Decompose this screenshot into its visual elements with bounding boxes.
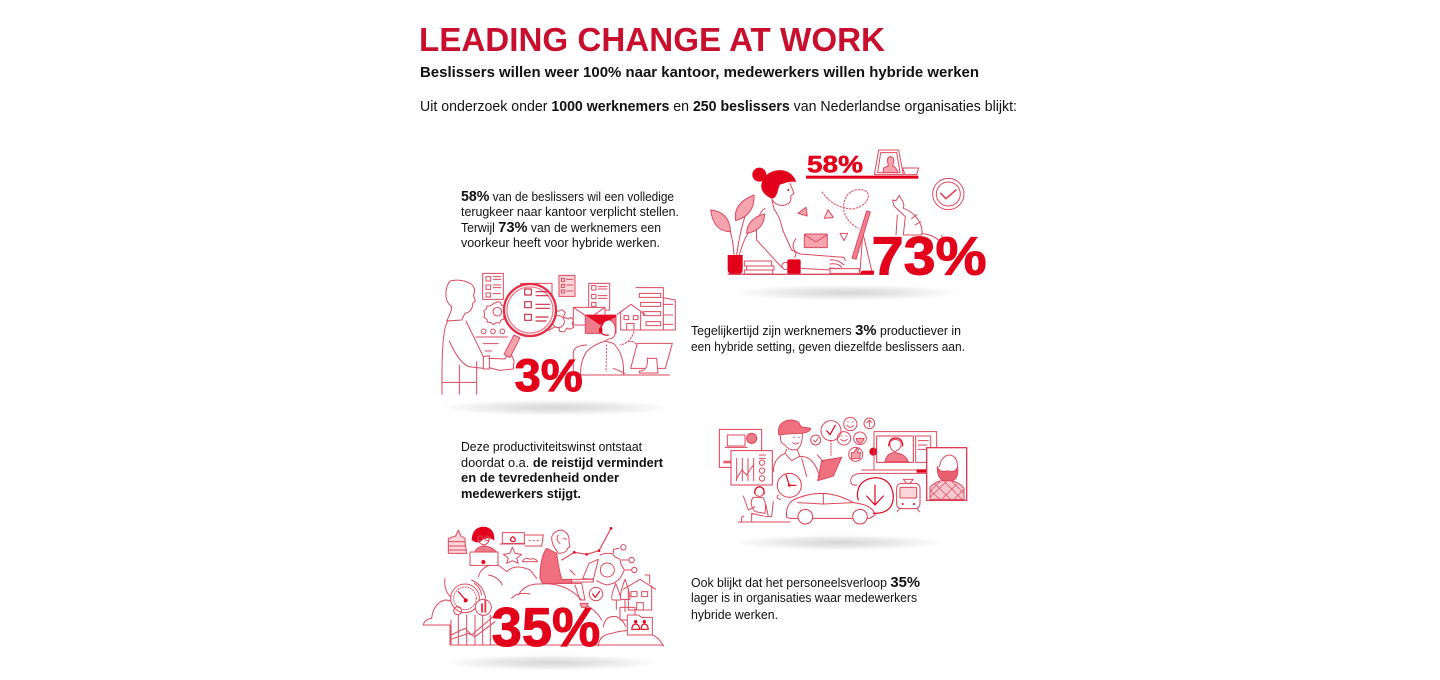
bar and line chart: [451, 615, 495, 645]
text block: 35%: lager is in organisaties waar medewerkers: [691, 591, 917, 605]
illustration: man with magnifier and 3%: [438, 273, 675, 416]
text block: 58% and 73%: voorkeur heeft voor hybride werken.: [461, 236, 660, 250]
magnifying glass: [504, 283, 556, 358]
check badge: [933, 178, 964, 210]
text block: 3%: Tegelijkertijd zijn werknemers 3% productiever in: [691, 322, 961, 339]
bearded man portrait: [927, 448, 967, 500]
text block: 3%: [691, 322, 965, 354]
text block: 58% and 73%: terugkeer naar kantoor verplicht stellen.: [461, 205, 679, 219]
text block: 3%: een hybride setting, geven diezelfde beslissers aan.: [691, 340, 965, 354]
clouds: [423, 564, 663, 646]
envelope and woman with headset: [573, 307, 669, 375]
shadow: [732, 285, 962, 301]
documents with charts: [719, 429, 772, 485]
checklist documents and gears: [483, 273, 610, 332]
older man with laptop: [540, 530, 598, 607]
shelf with 58%: 58%: [807, 151, 863, 178]
shadow: [442, 655, 662, 671]
coffee cup: [782, 239, 801, 274]
check badge: [589, 587, 603, 601]
house and office: [617, 288, 675, 330]
man: [442, 280, 514, 394]
house and trees: [612, 575, 656, 612]
illustration: commuter, car and video call: [719, 417, 967, 551]
monitor and keyboard: [830, 211, 874, 274]
folder with people: [620, 607, 652, 635]
3%: 3%: [515, 350, 583, 401]
building and woman with laptop: [448, 527, 498, 565]
woman: [752, 168, 845, 270]
laptop video call: [851, 432, 937, 485]
delivery man: [773, 420, 842, 481]
35%: 35%: [492, 596, 600, 658]
text block: productiviteitswinst: doordat o.a. de reistijd vermindert: [461, 456, 664, 470]
train: [897, 479, 920, 512]
chat bubbles, star and cloud: [500, 533, 543, 563]
plant: [711, 195, 765, 274]
illustration: clouds, people and 35%: [423, 527, 663, 671]
illustration: woman at desk with 58% and 73%: [711, 150, 987, 301]
text block: productiviteitswinst: Deze productiviteitswinst ontstaat: [461, 440, 643, 454]
text block: productiviteitswinst: en de tevredenheid onder: [461, 471, 619, 485]
shadow: [438, 400, 672, 416]
down arrow circle: [857, 478, 893, 513]
growth line: [562, 527, 612, 560]
text block: 58% and 73%: Terwijl 73% van de werknemers een: [461, 219, 661, 236]
text block: 58% and 73%: 58% van de beslissers wil een volledige: [461, 188, 674, 205]
cat: [893, 195, 942, 240]
73%: 73%: [872, 226, 987, 286]
shelf with 58%: [806, 150, 919, 179]
text block: 58% and 73%: [461, 188, 679, 250]
intro text: Uit onderzoek onder 1000 werknemers en 250 beslissers van Nederlandse organisaties blijkt:: [420, 98, 1017, 115]
text block: productiviteitswinst: medewerkers stijgt.: [461, 487, 581, 501]
text block: 35%: Ook blijkt dat het personeelsverloop 35%: [691, 574, 920, 591]
books: [744, 261, 774, 274]
monitor: [620, 332, 672, 373]
text block: 35%: [691, 574, 920, 622]
text block: productiviteitswinst: [461, 440, 664, 501]
shadow: [732, 535, 945, 551]
envelope and triangles: [798, 190, 868, 248]
clock: [777, 473, 801, 499]
title: LEADING CHANGE AT WORK: [419, 21, 885, 58]
small woman on chair: [738, 487, 790, 522]
car: [786, 493, 875, 524]
satisfaction icons: [811, 417, 875, 461]
desk line: [728, 272, 873, 276]
speedometer: [451, 580, 491, 615]
gear: [597, 545, 637, 585]
text block: 35%: hybride werken.: [691, 608, 778, 622]
subtitle: Beslissers willen weer 100% naar kantoor, medewerkers willen hybride werken: [420, 64, 979, 81]
